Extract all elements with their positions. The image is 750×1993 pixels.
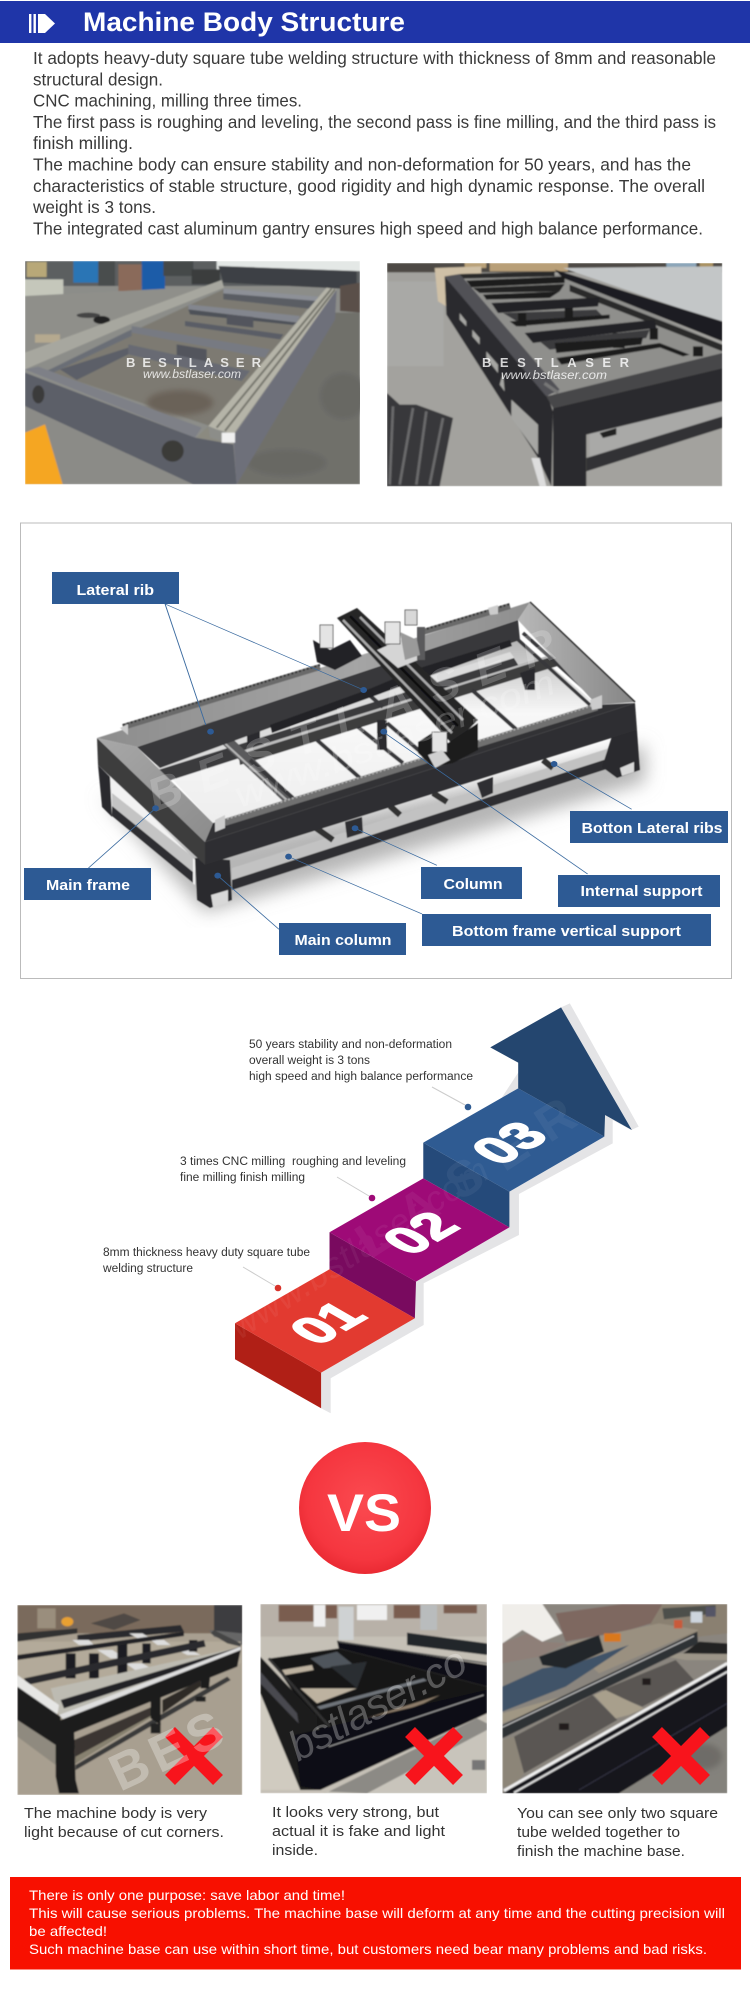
caption: It looks very strong, but: [272, 1805, 439, 1821]
label: Lateral rib: [52, 572, 179, 604]
label: Bottom frame vertical support: Bottom frame vertical support: [452, 923, 681, 940]
watermark: BESTLASER: [126, 355, 262, 370]
inner rails: [155, 652, 516, 773]
intro text block: The machine body can ensure stability and non-deformation for 50 years, and has the: [33, 154, 691, 174]
callout: step 02: fine milling finish milling: [180, 1172, 305, 1184]
lower rails and gaps: [110, 775, 195, 885]
watermark: [126, 355, 262, 381]
label: Botton Lateral ribs: Botton Lateral ribs: [582, 820, 722, 837]
step 01 top: [235, 1269, 415, 1373]
photo: raw grey welded machine body: [25, 261, 367, 484]
VS badge: VS: [327, 1484, 401, 1543]
header bar: [0, 1, 750, 43]
caption: [24, 1806, 224, 1841]
caption: You can see only two square: [517, 1806, 718, 1822]
watermark: www.bstlaser.com: [222, 1149, 496, 1347]
panel: bad example 2: [260, 1604, 487, 1859]
step 03 top: [423, 1088, 604, 1192]
step 02 riser: [330, 1232, 416, 1318]
label: Main frame: [24, 868, 151, 900]
machine frame drawing: [97, 602, 645, 912]
caption: actual it is fake and light: [272, 1824, 445, 1840]
arrow head: [490, 1007, 632, 1137]
caption: [517, 1806, 718, 1860]
label: Lateral rib: Lateral rib: [76, 582, 154, 599]
intro text block: CNC machining, milling three times.: [33, 90, 302, 110]
caption: [272, 1805, 445, 1859]
outer faces: [205, 703, 637, 865]
callout: step 01: [102, 1247, 310, 1291]
watermark: www.bstlaser.com: [501, 368, 607, 382]
VS badge: [299, 1442, 431, 1574]
watermark: www.bstlaser.com: [143, 367, 241, 381]
watermark: [222, 1086, 586, 1347]
intro text block: The integrated cast aluminum gantry ensures high speed and high balance performance.: [33, 218, 703, 238]
icon: bars and play arrow: [29, 14, 55, 33]
red X mark: [410, 1732, 458, 1780]
callout: step 01: 8mm thickness heavy duty square tube: [103, 1247, 310, 1259]
label: Main frame: Main frame: [46, 877, 130, 894]
intro text block: It adopts heavy-duty square tube welding structure with thickness of 8mm and reasonable: [33, 48, 716, 68]
caption: tube welded together to: [517, 1825, 680, 1841]
watermark: BES: [101, 1698, 238, 1803]
label: Main column: [279, 923, 406, 955]
photo: black painted machine body: [387, 263, 722, 486]
floor opening: [157, 640, 597, 823]
label: Internal support: Internal support: [580, 883, 703, 900]
watermark: BESTLASER: [140, 618, 563, 821]
intro text block: The first pass is roughing and leveling, the second pass is fine milling, and the third pass is: [33, 112, 716, 132]
under-opening cross rails: [316, 760, 553, 840]
callout: step 02: [180, 1156, 406, 1201]
callout: step 03: [249, 1039, 473, 1110]
caption: inside.: [272, 1843, 318, 1859]
gantry: [313, 640, 362, 670]
top surface: [97, 602, 530, 747]
label: Main column: Main column: [294, 932, 392, 949]
callout: step 03: overall weight is 3 tons: [249, 1055, 370, 1067]
panel: bad example 1: [17, 1605, 242, 1841]
chart: three step staircase arrow: [222, 1003, 639, 1413]
watermark: www.bstlaser.com: [229, 661, 560, 816]
callout: red warning banner: be affected!: [29, 1923, 107, 1939]
photo: [260, 1604, 487, 1793]
intro text block: structural design.: [33, 69, 163, 89]
panel: bad example 3: [502, 1604, 727, 1860]
watermark: bstlaser.co: [280, 1637, 474, 1770]
stair shadow: [321, 1003, 639, 1413]
watermark: BESTLASER: [482, 355, 630, 370]
intro text block: finish milling.: [33, 133, 133, 153]
label: Internal support: [558, 875, 720, 907]
leader lines: [89, 604, 632, 929]
label: Bottom frame vertical support: [422, 914, 711, 946]
photo: [502, 1604, 727, 1793]
label: Column: Column: [444, 876, 502, 893]
callout: step 03: high speed and high balance performance: [249, 1071, 473, 1083]
back wall: [137, 620, 520, 768]
title: Machine Body Structure: [83, 7, 405, 37]
step 02 top: [330, 1178, 509, 1282]
red X mark: [657, 1732, 705, 1780]
photo: [17, 1605, 242, 1795]
intro text block: [32, 48, 716, 238]
caption: light because of cut corners.: [24, 1825, 224, 1841]
callout: red warning banner: This will cause serious problems. The machine base will deform at any time and the cutting precision will: [29, 1905, 725, 1921]
intro text block: characteristics of stable structure, good rigidity and high dynamic response. The overall: [33, 176, 705, 196]
callout: step 01: welding structure: [102, 1263, 193, 1275]
caption: finish the machine base.: [517, 1844, 685, 1860]
label: Botton Lateral ribs: [570, 811, 728, 843]
callout: red warning banner: Such machine base can use within short time, but customers need bear many problems and bad risks.: [29, 1941, 707, 1957]
number 01: 01: [277, 1294, 379, 1352]
callout: red warning banner: There is only one purpose: save labor and time!: [29, 1887, 345, 1903]
callout: step 03: 50 years stability and non-deformation: [249, 1039, 452, 1051]
panel: labelled machine structure diagram: [20, 523, 732, 978]
watermark: [482, 355, 630, 382]
callout: red warning banner: [10, 1877, 741, 1970]
step 01 riser: [235, 1323, 321, 1408]
red X mark: [170, 1732, 218, 1780]
intro text block: weight is 3 tons.: [32, 197, 156, 217]
callout: step 02: 3 times CNC milling roughing and leveling: [180, 1156, 406, 1168]
label: Column: [421, 867, 522, 899]
watermark: LASER: [345, 1086, 586, 1269]
number 03: 03: [459, 1114, 561, 1173]
step 03 riser: [423, 1143, 509, 1227]
number 02: 02: [370, 1204, 472, 1263]
legs: [98, 765, 112, 817]
caption: The machine body is very: [24, 1806, 208, 1822]
